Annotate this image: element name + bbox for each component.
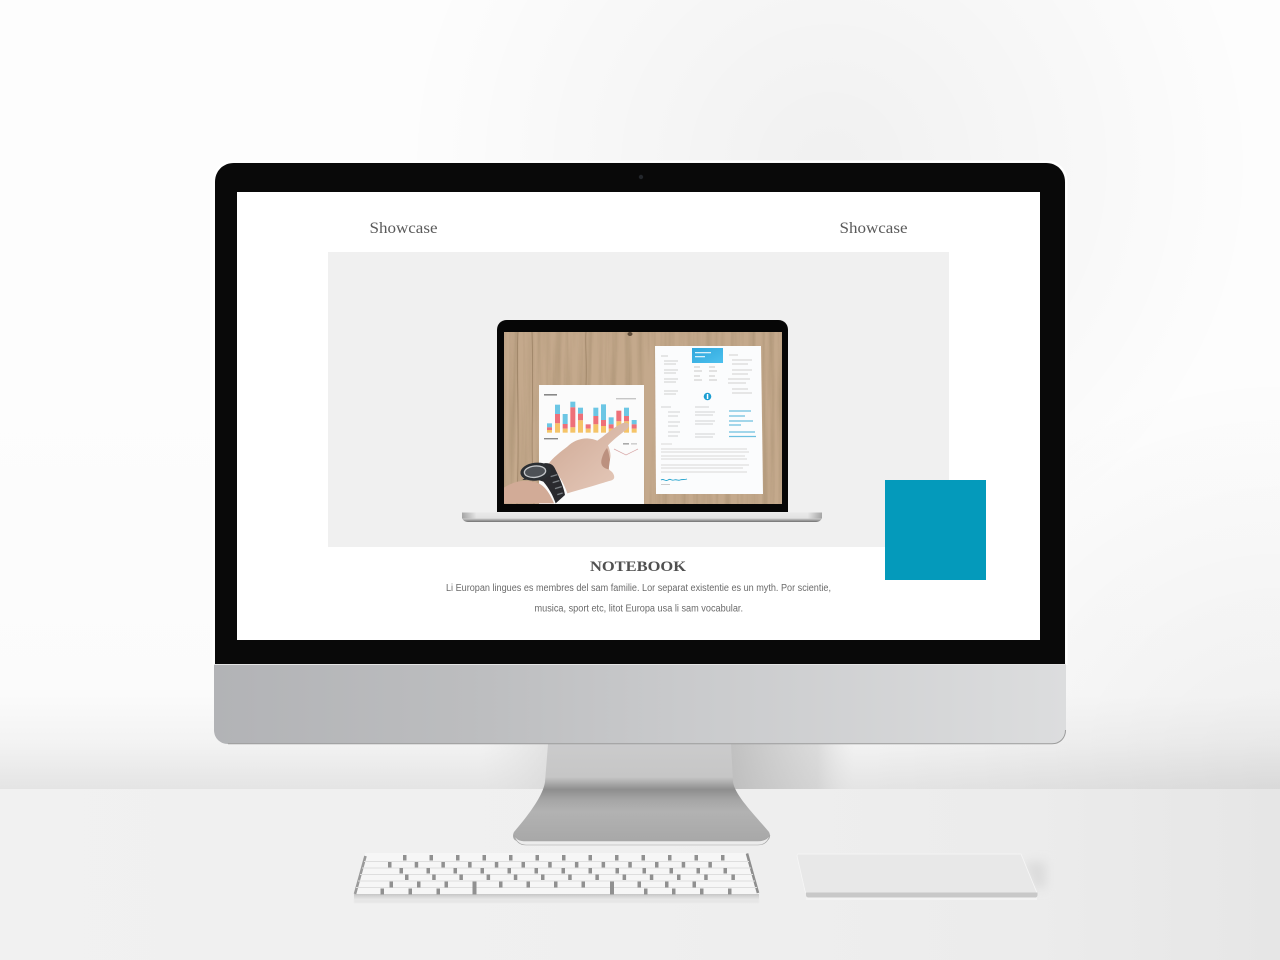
monitor chin [214,664,1066,744]
keyboard row lines [356,862,757,888]
monitor [214,162,1066,744]
forearm [504,481,554,503]
wall shadow behind stand [480,744,855,789]
webcam [639,175,643,179]
laptop lid [497,320,788,512]
stacked bar chart [547,402,637,433]
watch band [522,463,565,503]
hand [549,423,629,493]
monitor stand [513,744,770,845]
pointing hand and watch [504,423,629,503]
keyboard key gaps [380,855,735,894]
keyboard body [354,853,759,899]
resume paragraph [661,444,749,472]
resume blue skill bars [729,411,756,436]
heading left: Showcase: Showcase [370,220,438,237]
title: NOTEBOOK: NOTEBOOK [590,559,686,575]
trackpad [797,854,1046,900]
small line chart [614,449,638,455]
heading right: Showcase: Showcase [840,220,908,237]
resume signature [661,479,687,481]
description text [446,583,831,614]
wood background [504,332,782,504]
keyboard side edges [355,856,366,894]
grey showcase panel [328,252,949,547]
resume centre column [694,367,717,380]
description text: musica, sport etc, litot Europa usa li sam vocabular. [534,604,743,614]
laptop base [462,512,822,522]
teal accent square [885,480,986,580]
description text: Li Europan lingues es membres del sam familie. Lor separat existentie es un myth. Por scientie, [446,583,831,594]
resume left column [661,356,678,394]
chart paper [539,385,644,504]
resume blue banner [692,348,723,363]
monitor bezel [215,163,1065,665]
keyboard [354,853,759,903]
screen [237,192,1040,640]
trackpad side shadow [1024,862,1046,888]
trackpad surface [797,854,1037,893]
watch case [520,462,544,481]
desk surface [0,789,1280,960]
resume right column [728,355,752,393]
keyboard reflection [354,899,759,903]
trackpad lip [806,892,1038,898]
monitor halo [214,162,1066,665]
resume mid section [661,407,715,437]
watch links [551,475,563,495]
laptop mockup [462,320,822,522]
fold between fingers [601,448,610,469]
resume circle icon [704,393,711,400]
resume paper [655,346,763,494]
laptop screen photo [504,332,782,504]
